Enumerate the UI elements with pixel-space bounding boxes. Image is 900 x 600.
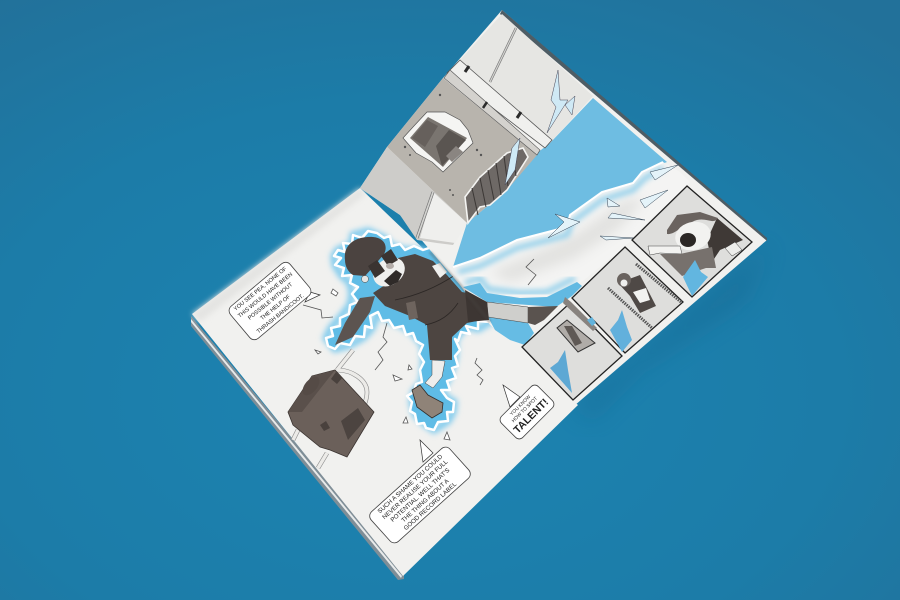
blue band below cloud (463, 282, 582, 307)
mouth (384, 270, 402, 286)
hood (667, 212, 718, 234)
arm and belt details (395, 275, 458, 325)
figure (618, 275, 656, 313)
speech bubble 2: NEVER REALISE YOUR FULL (381, 458, 450, 521)
small sparks (303, 289, 483, 440)
card (725, 242, 742, 256)
speech bubble 3: YOU KNOW (509, 394, 533, 417)
speech bubble 3: TALENT! (511, 396, 551, 436)
man's leg on right page (465, 290, 558, 325)
concrete wall (387, 78, 537, 223)
glasses (368, 249, 398, 278)
speech bubble 1: THRASH BANDICOOT. (256, 293, 306, 335)
speech bubble 2: THE THING ABOUT A (400, 477, 451, 524)
speech bubble 1 (227, 260, 320, 342)
lightning top (547, 70, 575, 133)
arm (648, 246, 682, 255)
amp cables (293, 350, 367, 468)
lower wall (360, 147, 467, 245)
upper wall (460, 14, 593, 143)
comic panel 1 (632, 186, 752, 297)
speech bubble 2: GOOD RECORD LABEL (403, 481, 459, 532)
speech bubble 1: YOU SEE PEA, NONE OF (233, 266, 289, 313)
coat tail (335, 296, 375, 345)
centre fold shadow (430, 252, 490, 322)
cloud edge glow (458, 168, 663, 272)
face (672, 218, 714, 254)
figure: electrocuted man (335, 237, 492, 418)
speech bubble 1: THE HELP OF (260, 294, 292, 322)
pole (417, 192, 433, 238)
right page (360, 10, 767, 406)
nose (386, 263, 394, 269)
flame (610, 310, 632, 352)
white lower wall patch (420, 192, 467, 243)
speech bubble 2: SUCH A SHAME YOU COULD (376, 453, 445, 515)
ear (362, 276, 368, 282)
torn clothes (660, 247, 716, 276)
face (368, 252, 410, 292)
open booklet (191, 10, 767, 580)
page stack edge (191, 316, 404, 580)
hole in wall with drum (465, 138, 528, 223)
speckles (404, 94, 482, 196)
cage (557, 320, 595, 352)
machine in wall (403, 112, 473, 172)
speech bubble 3: HOW TO SPOT (511, 396, 539, 424)
speech bubble 2: POTENTIAL. WELL THAT'S (389, 467, 451, 524)
rock strips (608, 264, 681, 328)
white energy cloud (453, 162, 690, 298)
ice shards (548, 165, 678, 240)
book shadow (575, 245, 768, 420)
torso and trousers (373, 254, 492, 360)
comic panel 3 (522, 303, 622, 400)
hair (345, 237, 386, 276)
speech bubble 3 (498, 383, 556, 441)
flame (550, 350, 572, 393)
speech bubble 2 (367, 440, 473, 545)
comic panel 2 (572, 247, 683, 353)
sock (425, 360, 445, 388)
blue patch under leg (488, 317, 534, 345)
speech bubble 1: POSSIBLE WITHOUT (247, 282, 294, 322)
left page (192, 188, 578, 576)
shoe (412, 385, 443, 418)
pocket (406, 301, 418, 320)
hand (432, 263, 447, 278)
ceiling beam and pipes (444, 60, 552, 155)
sky (453, 98, 667, 267)
cape (707, 218, 743, 262)
gap strip between panels (563, 297, 597, 331)
amplifier (288, 370, 374, 457)
flame (683, 260, 708, 296)
electric halo around figure (326, 231, 490, 430)
speech bubble 1: THIS WOULD HAVE BEEN (237, 272, 294, 319)
